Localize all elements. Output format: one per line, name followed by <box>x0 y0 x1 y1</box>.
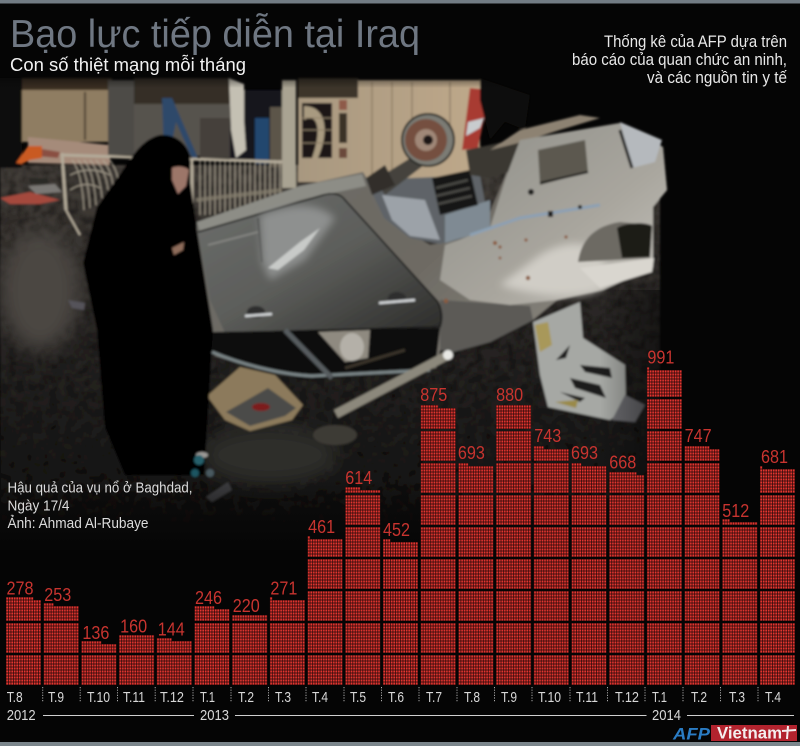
bar T.4 2014: 681: 681 <box>761 447 788 467</box>
month labels: T.8 <box>464 689 480 706</box>
bottom band <box>0 742 800 746</box>
bar T.12 2012: 144 <box>157 620 192 685</box>
month labels: T.9 <box>501 689 517 706</box>
bar T.4 2014: 681 <box>760 447 795 685</box>
bar T.12 2013: 668 <box>609 452 644 685</box>
bar chart: monthly deaths <box>6 348 795 685</box>
bar T.10 2012: 136: 136 <box>82 623 109 643</box>
bar T.1 2014: 991 <box>647 348 682 685</box>
car: axle <box>466 138 530 178</box>
year axis: 2014 <box>652 707 681 724</box>
photo: fence <box>62 153 282 238</box>
bar T.4 2013: 461: 461 <box>308 517 335 537</box>
source note <box>572 33 787 87</box>
bar T.1 2014: 991: 991 <box>647 348 674 368</box>
bar T.9 2012: 253 <box>44 585 79 685</box>
month labels: T.3 <box>729 689 745 706</box>
month labels <box>7 689 781 706</box>
bar T.5 2013: 614: 614 <box>345 468 372 488</box>
photo: debris <box>0 146 85 310</box>
bar T.6 2013: 452 <box>383 520 418 685</box>
photo: metal pipe <box>313 350 453 445</box>
bar T.3 2014: 512: 512 <box>722 501 749 521</box>
month labels: T.11 <box>123 689 145 706</box>
bar T.10 2012: 136 <box>81 623 116 685</box>
bar T.12 2013: 668: 668 <box>609 452 636 472</box>
photo: buildings background <box>0 78 530 188</box>
year axis <box>7 707 794 724</box>
month labels: T.8 <box>7 689 23 706</box>
logo: AFP Vietnam+: Vietnam <box>717 724 782 742</box>
bar T.11 2012: 160: 160 <box>120 616 147 636</box>
month labels: T.4 <box>312 689 328 706</box>
source note: và các nguồn tin y tế <box>647 69 787 87</box>
bar T.3 2014: 512 <box>722 501 757 685</box>
month labels: T.2 <box>691 689 707 706</box>
car: door handles <box>245 292 415 318</box>
bar T.3 2013: 271: 271 <box>270 578 297 598</box>
photo: floor mat <box>207 367 303 431</box>
bar T.4 2013: 461 <box>308 517 343 685</box>
car: wheel hub <box>401 113 455 167</box>
bar T.7 2013: 875 <box>420 385 456 685</box>
month labels: T.1 <box>652 689 667 706</box>
month labels: T.7 <box>426 689 442 706</box>
bar T.1 2013: 246 <box>194 588 230 685</box>
photo: car body <box>197 113 667 380</box>
month labels: T.3 <box>275 689 291 706</box>
month labels: T.6 <box>388 689 404 706</box>
bar T.8 2012: 278: 278 <box>6 578 34 598</box>
logo: AFP Vietnam+ <box>672 724 797 744</box>
title: Bạo lực tiếp diễn tại Iraq <box>10 13 420 56</box>
bar T.12 2012: 144: 144 <box>158 620 185 640</box>
logo: AFP Vietnam+: AFP <box>672 724 711 744</box>
bar T.8 2013: 693: 693 <box>458 443 485 463</box>
month labels: T.4 <box>765 689 781 706</box>
photo caption: Hậu quả của vụ nổ ở Baghdad, <box>8 480 192 496</box>
photo caption: Ảnh: Ahmad Al-Rubaye <box>8 515 148 532</box>
bar T.5 2013: 614 <box>345 468 380 685</box>
month labels: T.5 <box>350 689 366 706</box>
bar T.2 2014: 747 <box>685 426 720 685</box>
month labels: T.10 <box>87 689 110 706</box>
month labels: T.9 <box>48 689 64 706</box>
bar T.2 2013: 220 <box>232 596 267 685</box>
bar T.2 2013: 220: 220 <box>233 596 260 616</box>
photo: woman in black abaya <box>83 135 232 502</box>
bar T.11 2013: 693: 693 <box>571 443 598 463</box>
bar T.2 2014: 747: 747 <box>685 426 712 446</box>
car: door panels <box>198 194 442 333</box>
bar T.9 2013: 880: 880 <box>496 385 523 405</box>
bar T.11 2013: 693 <box>571 443 606 685</box>
bar T.9 2012: 253: 253 <box>44 585 71 605</box>
bar T.3 2013: 271 <box>270 578 305 685</box>
subtitle: Con số thiệt mạng mỗi tháng <box>10 54 246 75</box>
car: side windows <box>212 328 440 380</box>
month labels: T.10 <box>538 689 561 706</box>
bar T.7 2013: 875: 875 <box>420 385 447 405</box>
top band <box>0 0 800 4</box>
month labels: T.11 <box>576 689 598 706</box>
photo: rear bumper fragment <box>533 302 645 422</box>
bar T.1 2013: 246: 246 <box>195 588 222 608</box>
photo caption: Ngày 17/4 <box>8 498 70 514</box>
year axis: 2013 <box>200 707 229 724</box>
bar T.6 2013: 452: 452 <box>383 520 410 540</box>
car: underside wheel well <box>366 175 490 244</box>
month labels: T.2 <box>238 689 254 706</box>
month labels: T.12 <box>615 689 639 706</box>
month labels: T.1 <box>200 689 215 706</box>
bar T.10 2013: 743 <box>534 426 569 685</box>
bar T.11 2012: 160 <box>119 616 154 685</box>
month separators <box>43 687 758 702</box>
car: rear panel <box>440 123 667 305</box>
bar T.10 2013: 743: 743 <box>534 426 561 446</box>
bar T.8 2013: 693 <box>458 443 493 685</box>
bar T.8 2012: 278 <box>6 578 41 685</box>
bar T.9 2013: 880 <box>496 385 531 685</box>
photo: ground <box>0 165 660 550</box>
month labels: T.12 <box>160 689 184 706</box>
photo caption <box>8 480 192 532</box>
year axis: 2012 <box>7 707 36 724</box>
